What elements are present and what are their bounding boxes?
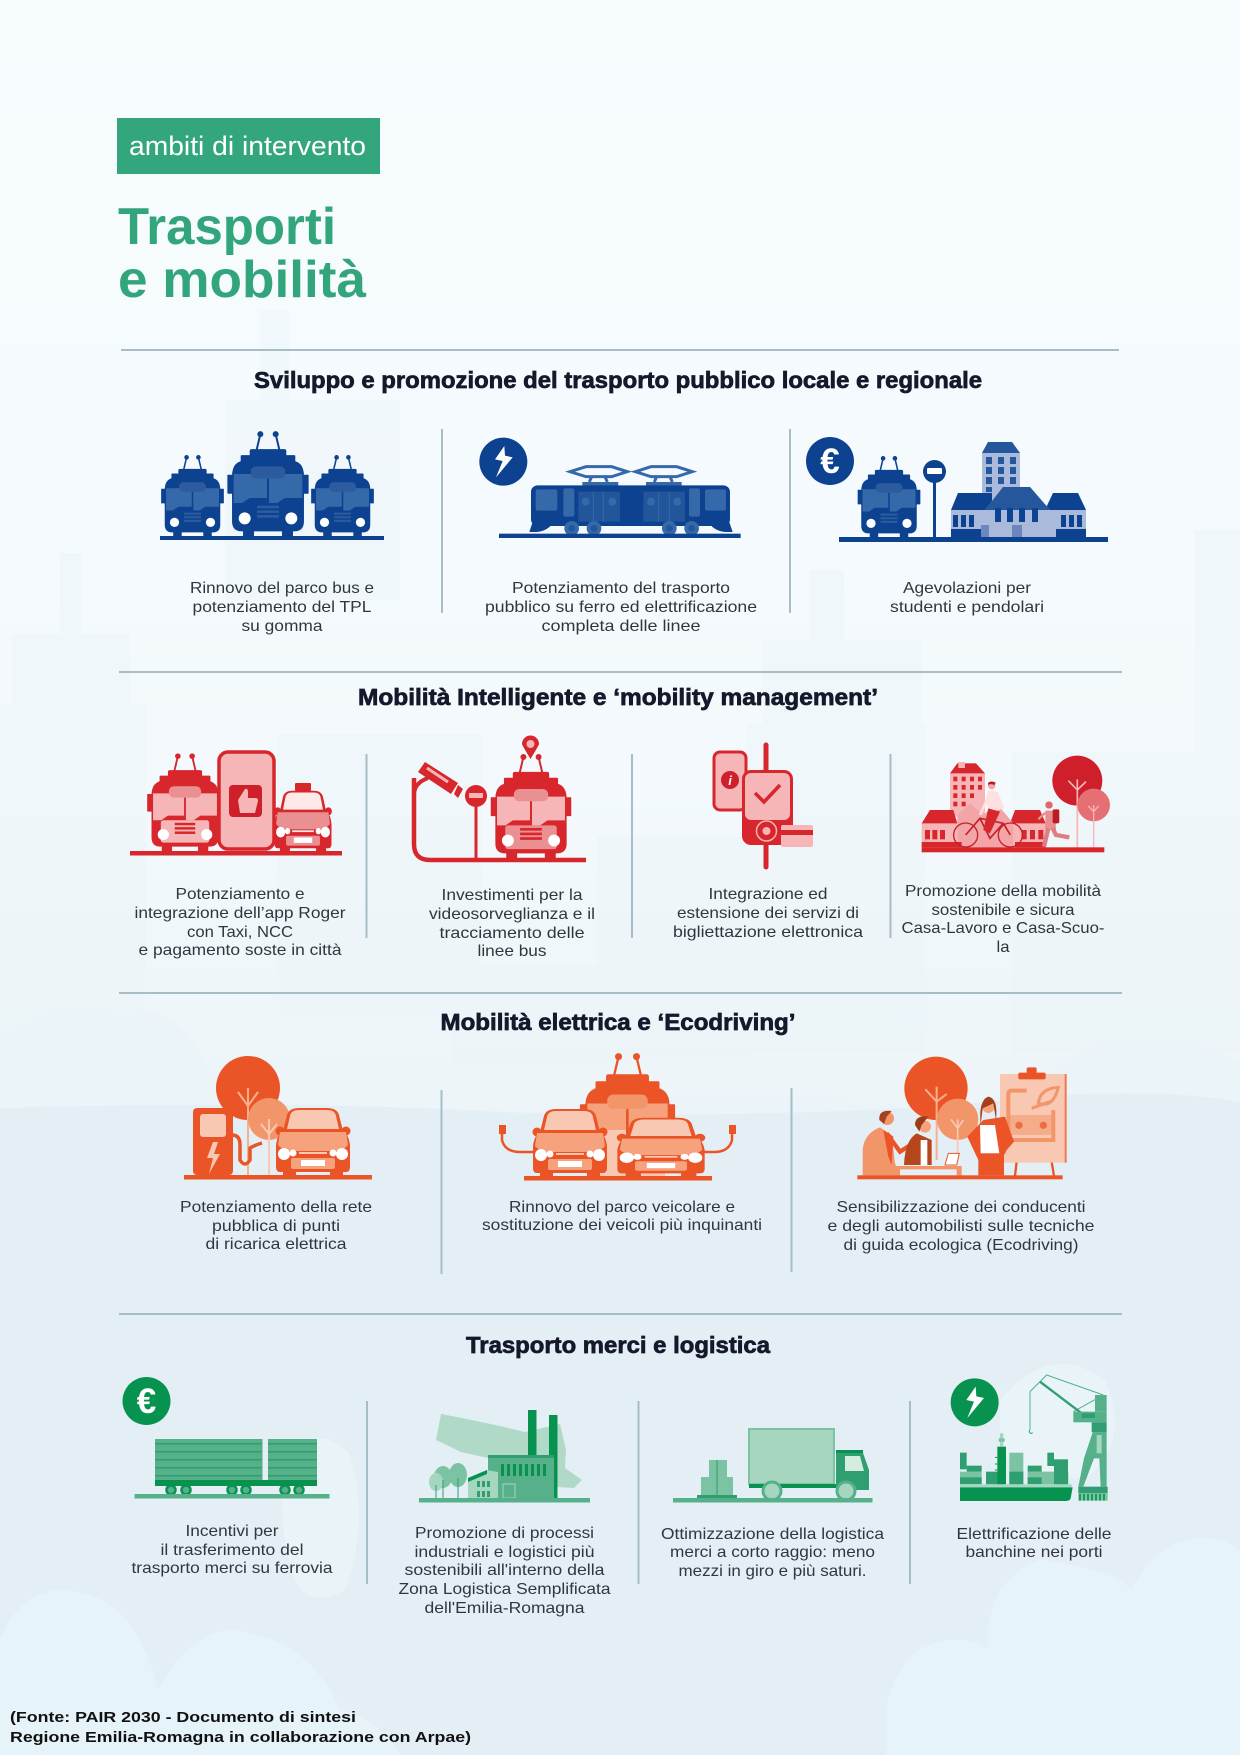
icon: delivery truck bbox=[673, 1429, 872, 1502]
text: zona logistica bbox=[398, 1525, 611, 1617]
icon: camera, stop and bus with pin bbox=[414, 736, 586, 860]
text: ricarica: pubblica di punti bbox=[212, 1218, 340, 1235]
text: potenziamento ferro: Potenziamento del trasporto bbox=[512, 580, 730, 597]
heading: trasporto merci: Trasporto merci e logistica bbox=[466, 1332, 770, 1358]
text: casa lavoro: Casa-Lavoro e Casa-Scuo- bbox=[902, 920, 1104, 937]
panel: mobilità intelligente bbox=[119, 672, 1122, 960]
text: videosorveglianza bbox=[429, 887, 595, 960]
text: ferrovia bbox=[132, 1523, 333, 1577]
icon: houses, cyclist and runner bbox=[922, 756, 1110, 852]
heading: mobilità elettrica: Mobilità elettrica e ‘Ecodriving’ bbox=[440, 1009, 796, 1035]
text: ecodriving: di guida ecologica (Ecodriving) bbox=[844, 1237, 1078, 1254]
text: parco veicolare: sostituzione dei veicoli più inquinanti bbox=[482, 1217, 762, 1234]
text: potenziamento ferro bbox=[485, 580, 757, 635]
text: zona logistica: sostenibili all'interno della bbox=[404, 1562, 605, 1579]
text: app roger: Potenziamento e bbox=[176, 886, 305, 903]
text: zona logistica: industriali e logistici più bbox=[414, 1544, 594, 1561]
text: bigliettazione: bigliettazione elettronica bbox=[673, 924, 863, 941]
icon: bus, app phone and taxi bbox=[130, 752, 342, 856]
text: bigliettazione bbox=[673, 886, 863, 941]
icon: electric vehicles bbox=[499, 1053, 736, 1180]
source note: Regione Emilia-Romagna in collaborazione con Arpae) bbox=[10, 1729, 471, 1746]
text: agevolazioni bbox=[890, 580, 1044, 616]
text: ferrovia: trasporto merci su ferrovia bbox=[132, 1560, 333, 1577]
text: zona logistica: dell'Emilia-Romagna bbox=[424, 1600, 585, 1617]
text: zona logistica: Zona Logistica Semplificata bbox=[398, 1581, 611, 1598]
text: rinnovo parco bus: Rinnovo del parco bus e bbox=[190, 580, 374, 597]
text: ferrovia: Incentivi per bbox=[186, 1523, 279, 1540]
text: rinnovo parco bus bbox=[190, 580, 374, 635]
icon: ticket validator: i bbox=[728, 773, 732, 788]
text: ricarica bbox=[180, 1199, 372, 1253]
text: videosorveglianza: videosorveglianza e il bbox=[429, 906, 595, 923]
source note: (Fonte: PAIR 2030 - Documento di sintesi bbox=[10, 1709, 356, 1726]
heading: mobilità intelligente: Mobilità Intelligente e ‘mobility management’ bbox=[358, 684, 878, 710]
icon: port crane and container ship bbox=[951, 1375, 1108, 1501]
text: agevolazioni: Agevolazioni per bbox=[903, 580, 1032, 597]
text: parco veicolare: Rinnovo del parco veicolare e bbox=[509, 1199, 735, 1216]
icon: ticket validator bbox=[714, 745, 813, 867]
text: logistica corto raggio bbox=[661, 1526, 884, 1580]
icon: people and ecodriving board bbox=[857, 1057, 1067, 1179]
text: casa lavoro bbox=[902, 883, 1104, 956]
text: logistica corto raggio: Ottimizzazione della logistica bbox=[661, 1526, 884, 1543]
icon: charging station and car bbox=[184, 1056, 372, 1180]
text: potenziamento ferro: completa delle linee bbox=[542, 618, 701, 635]
title bbox=[118, 198, 367, 309]
text: banchine bbox=[956, 1526, 1112, 1561]
text: casa lavoro: sostenibile e sicura bbox=[932, 902, 1075, 919]
panel: mobilità elettrica bbox=[119, 993, 1122, 1274]
text: bigliettazione: estensione dei servizi di bbox=[677, 905, 859, 922]
text: logistica corto raggio: mezzi in giro e più saturi. bbox=[678, 1563, 866, 1580]
title: Trasporti bbox=[118, 198, 336, 256]
text: videosorveglianza: linee bus bbox=[478, 943, 546, 960]
text: potenziamento ferro: pubblico su ferro ed elettrificazione bbox=[485, 599, 757, 616]
text: videosorveglianza: tracciamento delle bbox=[440, 925, 585, 942]
panel: trasporto pubblico bbox=[121, 350, 1119, 635]
text: logistica corto raggio: merci a corto raggio: meno bbox=[670, 1544, 875, 1561]
text: app roger: e pagamento soste in città bbox=[138, 942, 342, 959]
text: casa lavoro: Promozione della mobilità bbox=[905, 883, 1101, 900]
text: zona logistica: Promozione di processi bbox=[415, 1525, 594, 1542]
text: app roger bbox=[134, 886, 346, 959]
text: agevolazioni: studenti e pendolari bbox=[890, 599, 1044, 616]
text: parco veicolare bbox=[482, 1199, 762, 1234]
text: ricarica: di ricarica elettrica bbox=[206, 1236, 347, 1253]
text: ricarica: Potenziamento della rete bbox=[180, 1199, 372, 1216]
text: ecodriving bbox=[828, 1199, 1095, 1254]
icon: euro, bus, stop and buildings: € bbox=[820, 442, 840, 481]
icon: freight wagons: € bbox=[137, 1382, 156, 1421]
heading: trasporto pubblico: Sviluppo e promozione del trasporto pubblico locale e regionale bbox=[254, 367, 982, 393]
text: app roger: integrazione dell’app Roger bbox=[134, 905, 346, 922]
category badge bbox=[117, 118, 380, 174]
text: rinnovo parco bus: potenziamento del TPL bbox=[192, 599, 372, 616]
text: ecodriving: Sensibilizzazione dei conducenti bbox=[836, 1199, 1086, 1216]
panel: trasporto merci bbox=[119, 1314, 1122, 1617]
text: bigliettazione: Integrazione ed bbox=[708, 886, 828, 903]
icon: freight wagons bbox=[122, 1377, 330, 1498]
source note bbox=[10, 1709, 471, 1746]
text: videosorveglianza: Investimenti per la bbox=[442, 887, 583, 904]
text: ferrovia: il trasferimento del bbox=[160, 1542, 304, 1559]
text: rinnovo parco bus: su gomma bbox=[242, 618, 323, 635]
category badge: ambiti di intervento bbox=[129, 131, 366, 161]
text: banchine: Elettrificazione delle bbox=[956, 1526, 1112, 1543]
title: e mobilità bbox=[118, 251, 367, 309]
icon: euro, bus, stop and buildings bbox=[806, 437, 1108, 542]
text: banchine: banchine nei porti bbox=[966, 1544, 1102, 1561]
icon: three buses bbox=[160, 431, 384, 540]
icon: factory on regional map bbox=[419, 1410, 590, 1502]
text: casa lavoro: la bbox=[996, 939, 1010, 956]
icon: electric train bbox=[479, 438, 741, 538]
text: app roger: con Taxi, NCC bbox=[187, 924, 293, 941]
text: ecodriving: e degli automobilisti sulle tecniche bbox=[828, 1218, 1095, 1235]
